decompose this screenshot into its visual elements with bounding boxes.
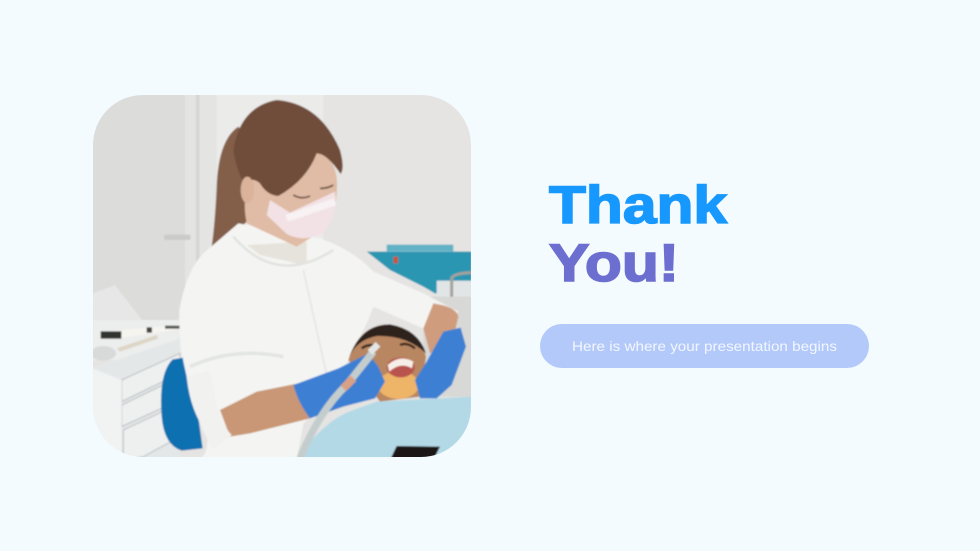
wall and door xyxy=(90,90,475,460)
title: Thank You! xyxy=(549,176,728,293)
teal storage box xyxy=(367,245,475,397)
face and neck xyxy=(245,152,337,247)
forearm xyxy=(220,383,310,437)
ponytail xyxy=(211,126,248,246)
subtitle text: Here is where your presentation begins xyxy=(572,338,837,354)
patient head xyxy=(348,303,458,402)
You!: You! xyxy=(549,234,679,293)
blue chair xyxy=(161,357,203,451)
photo: dentist treating a patient xyxy=(90,90,475,460)
blue gloves xyxy=(293,328,466,418)
white coat xyxy=(179,223,458,460)
Thank: Thank xyxy=(549,176,728,235)
white cabinet xyxy=(93,352,182,457)
surgical mask xyxy=(267,192,336,238)
subtitle pill xyxy=(540,324,869,368)
dental handpiece and hose xyxy=(300,352,373,458)
eyes xyxy=(293,185,333,198)
rolled sleeve xyxy=(185,378,232,437)
blue patient drape xyxy=(297,397,472,460)
paper and desk items xyxy=(91,285,183,361)
hair xyxy=(233,100,343,196)
